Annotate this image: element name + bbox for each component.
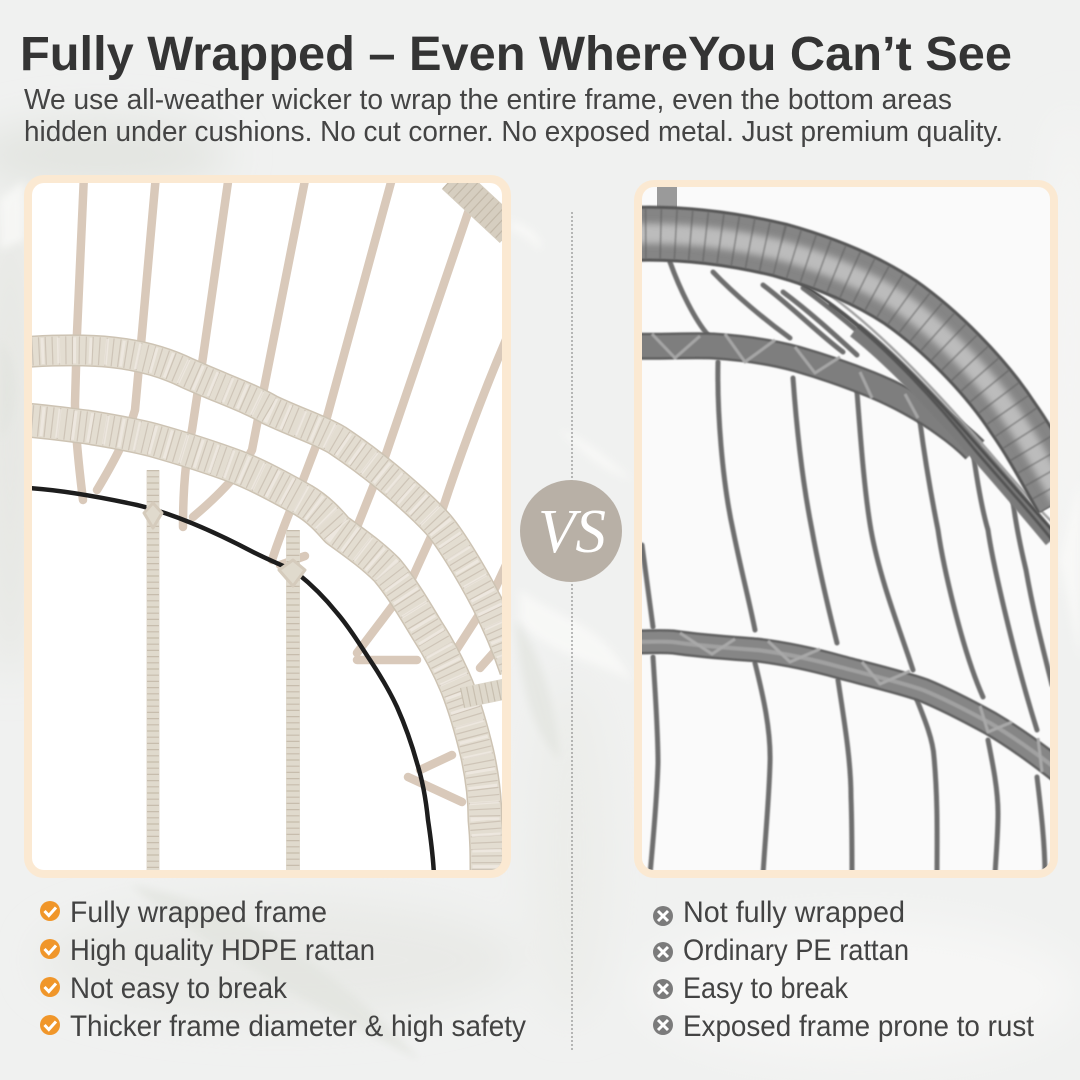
item: easy to break: Easy to break [683,972,848,1005]
panel: not fully wrapped grey frame photo [630,180,1062,878]
item: fully wrapped frame: Fully wrapped frame [70,896,327,929]
top wrapped band [630,234,1062,500]
middle band [630,334,975,450]
lower band [630,633,1060,772]
item: not fully wrapped: Not fully wrapped [683,896,905,929]
list: advantages [40,896,526,1043]
item: not easy to break: Not easy to break [70,972,287,1005]
wrapped vertical strips [146,470,160,875]
ribs: beige wires [75,175,508,812]
hanger stub [657,187,677,208]
wrapped rings [25,350,515,875]
VS badge: VS [538,498,606,566]
item: thicker frame: Thicker frame diameter & high safety [70,1010,526,1043]
corner band [452,178,510,232]
panel: fully wrapped beige frame photo [24,175,515,878]
subtitle [24,84,1003,148]
subtitle: We use all-weather wicker to wrap the entire frame, even the bottom areas [24,84,952,116]
item: high quality rattan: High quality HDPE rattan [70,934,375,967]
black steel wire [28,488,434,875]
item: exposed frame: Exposed frame prone to rust [683,1010,1034,1043]
divider: dashed line [571,212,573,1050]
VS badge [520,480,622,582]
subtitle: hidden under cushions. No cut corner. No exposed metal. Just premium quality. [24,116,1003,148]
ribs: grey wires [642,262,1052,875]
list: disadvantages [653,896,1034,1043]
branch band [462,688,510,698]
title: Fully Wrapped – Even WhereYou Can’t See [20,28,1012,81]
frond bundle under top band [800,283,1052,540]
item: ordinary rattan: Ordinary PE rattan [683,934,909,967]
